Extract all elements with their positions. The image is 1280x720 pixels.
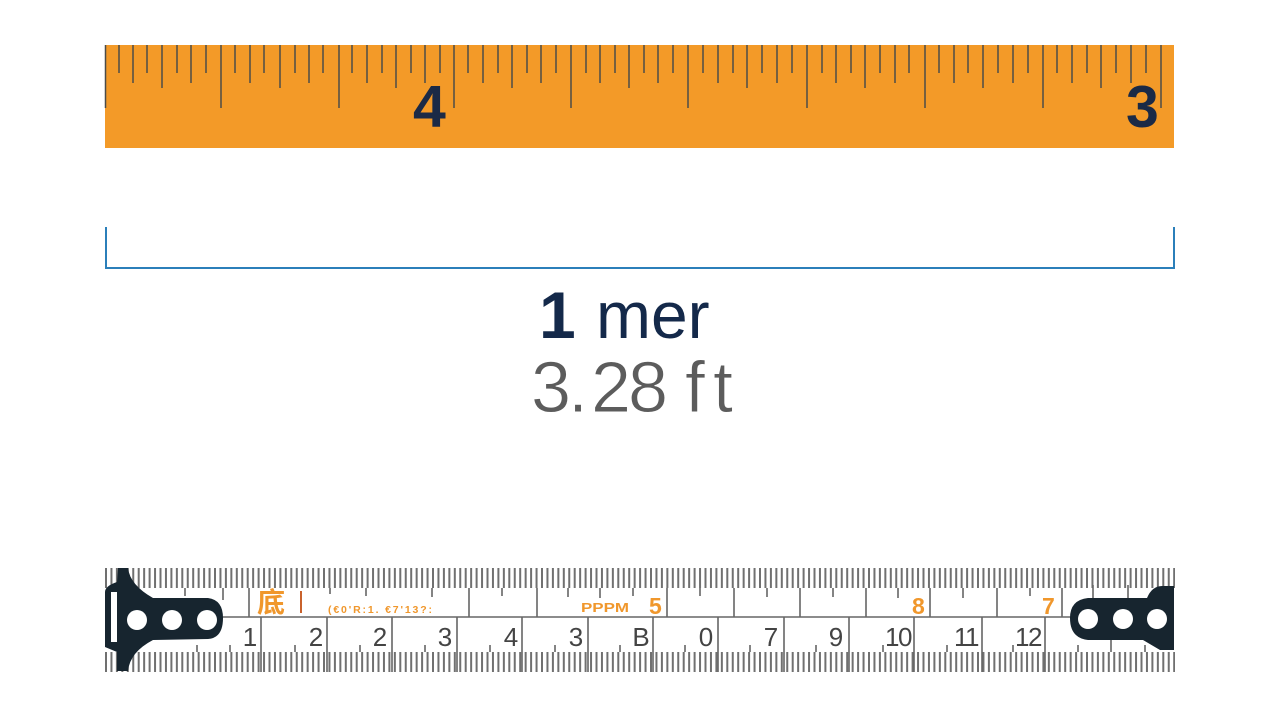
label: 3.28 feet: t	[713, 348, 733, 428]
tape orange markings	[257, 587, 1055, 619]
tape inch numbers: 0	[699, 622, 713, 652]
tape orange markings: PPPM	[581, 600, 629, 615]
icon: right tape clip	[1070, 586, 1174, 650]
tape orange markings: 5	[649, 593, 662, 619]
ruler tick marks	[106, 45, 1161, 108]
label: 3.28 feet: 8	[628, 348, 668, 428]
ruler number 4: 4	[413, 74, 446, 140]
tape hatch marks, top row	[105, 568, 1175, 588]
tape orange markings: 8	[912, 593, 925, 619]
tape orange markings: 底	[257, 587, 285, 618]
tape inch numbers: 2	[309, 622, 323, 652]
tape inch numbers: 7	[764, 622, 778, 652]
tape inch numbers: 3	[569, 622, 583, 652]
tape inch numbers: 2	[373, 622, 387, 652]
label: 3.28 feet: .	[568, 348, 588, 428]
tape hatch marks, bottom row	[105, 652, 1175, 672]
tape inch numbers: 1	[243, 622, 257, 652]
tape orange markings: 7	[1042, 593, 1055, 619]
tape inch numbers: 3	[438, 622, 452, 652]
label: 1 metre: 1	[539, 278, 576, 352]
label: 1 metre: mer	[596, 278, 710, 352]
tape inch numbers: 11	[954, 622, 979, 652]
tape inch numbers: 4	[504, 622, 518, 652]
panel: orange ruler	[105, 45, 1174, 148]
tape inch numbers: B	[632, 622, 650, 652]
tape centre line and scale lines	[185, 585, 1145, 672]
label: 3.28 feet: f	[685, 348, 706, 428]
panel: tape measure	[105, 568, 1175, 672]
label: 3.28 feet: 2	[591, 348, 631, 428]
ruler number 3: 3	[1126, 74, 1159, 140]
label: 3.28 feet: 3	[531, 348, 571, 428]
tape orange markings: (€0'R:1. €7'13?:	[328, 604, 432, 616]
bracket: one metre span	[106, 227, 1174, 268]
tape inch numbers: 10	[885, 622, 912, 652]
tape inch numbers	[243, 622, 1042, 652]
tape inch numbers: 9	[829, 622, 843, 652]
tape inch numbers: 12	[1015, 622, 1042, 652]
icon: left tape clip	[105, 568, 223, 671]
